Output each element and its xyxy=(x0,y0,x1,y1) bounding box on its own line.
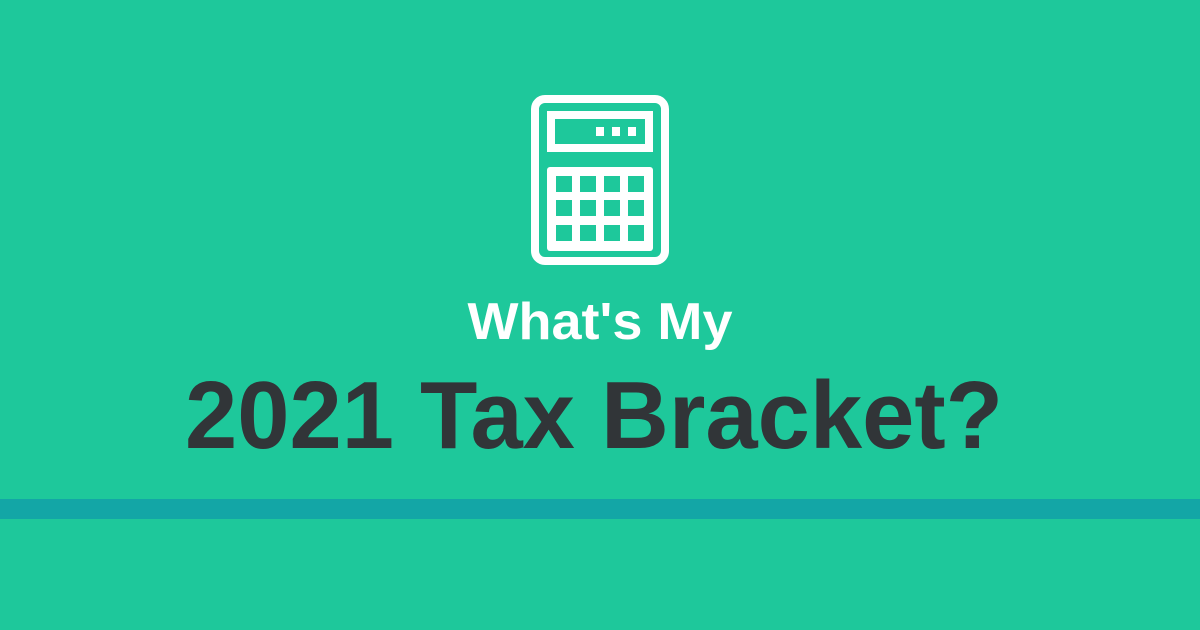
title: 2021 Tax Bracket? xyxy=(185,362,1003,469)
subtitle: What's My xyxy=(468,293,733,351)
icon: calculator xyxy=(535,99,665,261)
stripe xyxy=(0,499,1200,519)
